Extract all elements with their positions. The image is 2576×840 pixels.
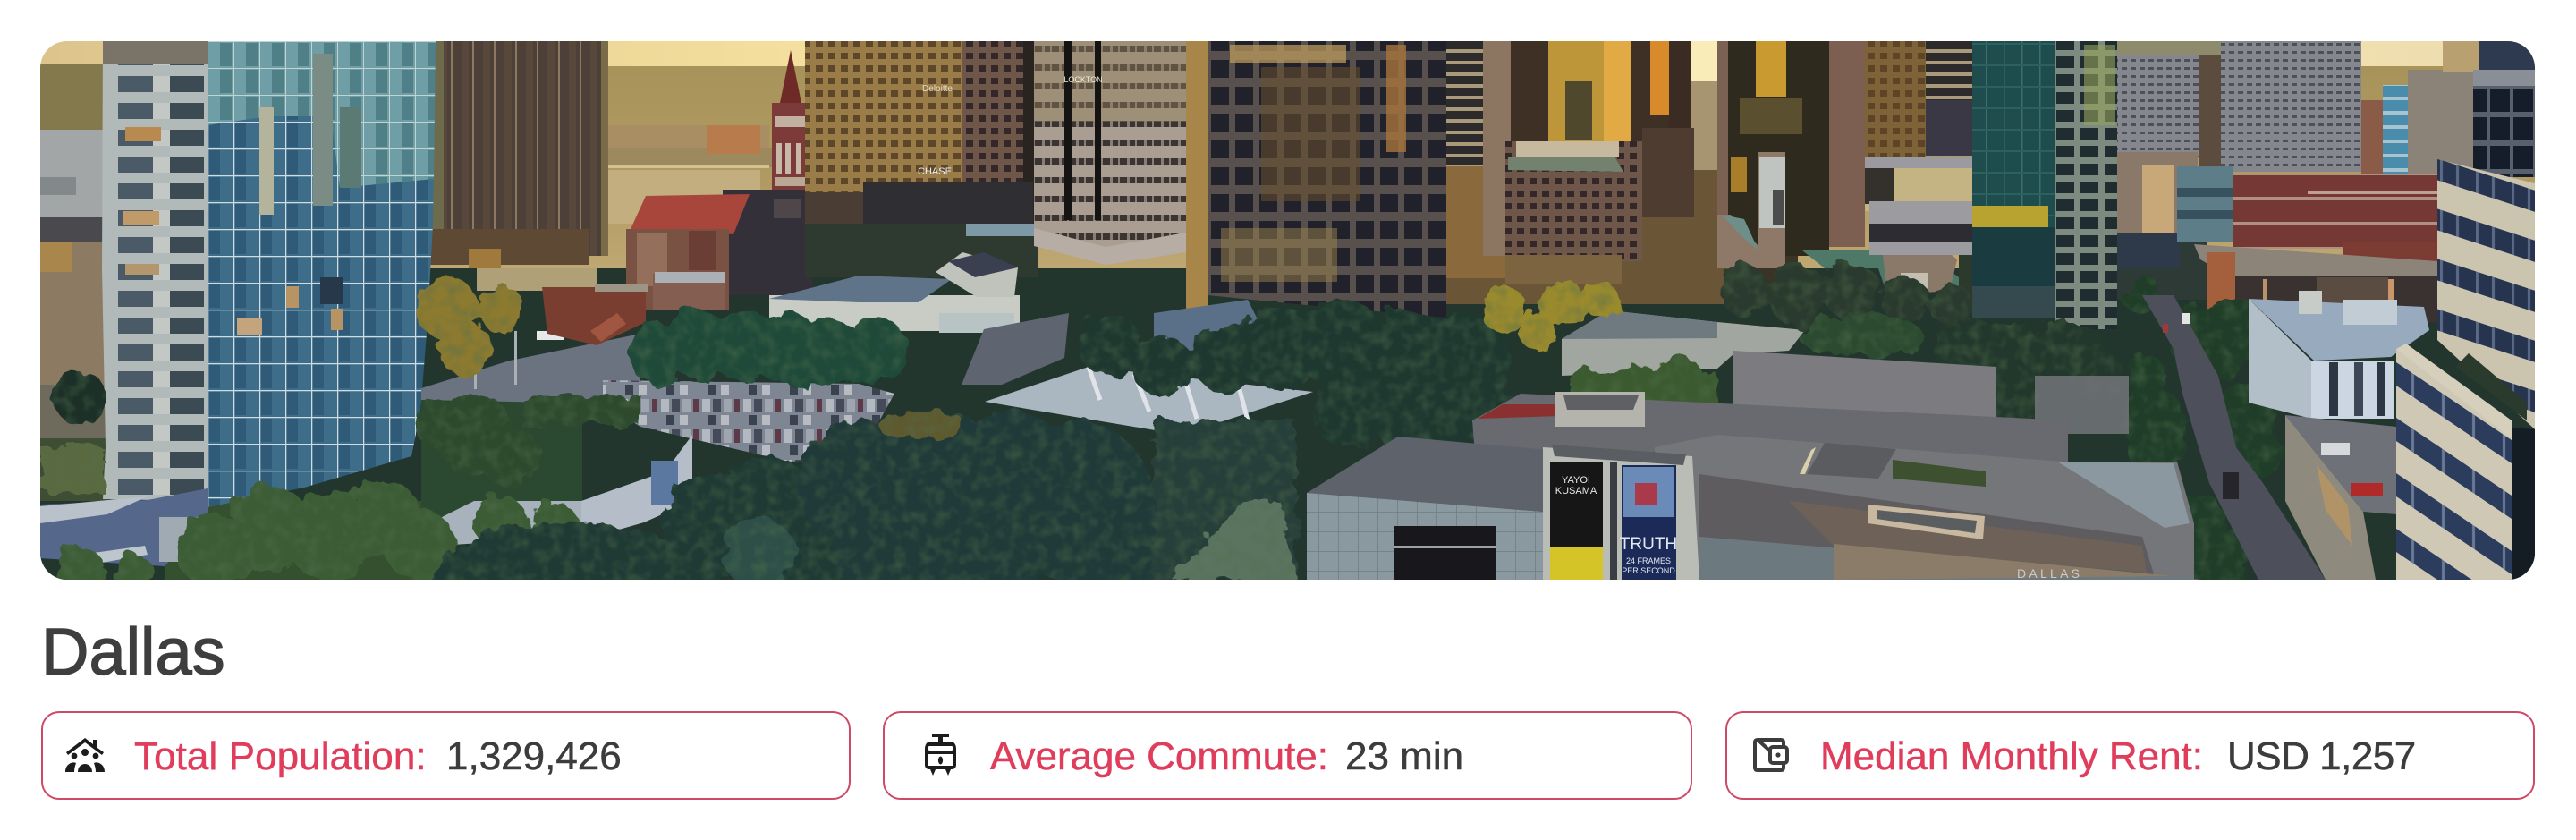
- sky and hazy horizon: [40, 41, 2535, 268]
- value: total population: 1,329,426: [446, 734, 622, 778]
- photo: Dallas skyline aerial view: [40, 41, 2535, 580]
- stone church tower and chapel: [1717, 152, 1972, 295]
- text on the banners and buildings: CHASE: [918, 166, 952, 177]
- parking structure: [2285, 415, 2396, 580]
- white building near chapel and low roof: [769, 252, 1805, 376]
- text on the banners and buildings: PER SECOND: [1622, 566, 1675, 575]
- grey high-rises and upper right skyline: [2117, 41, 2535, 190]
- icon: wallet: [1753, 738, 1789, 772]
- stat card: total population: [41, 711, 851, 800]
- text on the banners and buildings: 24 FRAMES: [1626, 556, 1671, 565]
- church with spire and red roof: [626, 50, 812, 310]
- stat card: average commute: [883, 711, 1692, 800]
- gold office tower: [805, 41, 1038, 277]
- text on the banners and buildings: YAYOI: [1562, 475, 1590, 486]
- left side buildings: [40, 130, 107, 438]
- green glass tower: [1972, 41, 2117, 329]
- text on the banners and buildings: TRUTH: [1620, 535, 1677, 554]
- museum front block with banners: [1307, 437, 1699, 580]
- road and parking lot: [421, 313, 1069, 462]
- tree canopy masses: [40, 259, 2284, 580]
- icon: tram: [925, 734, 956, 776]
- text on the banners and buildings: LOCKTON: [1063, 75, 1103, 84]
- text on the banners and buildings: [918, 75, 2080, 581]
- tower with balconies: [102, 41, 208, 501]
- low brick buildings: [477, 268, 648, 345]
- value: median monthly rent: USD 1,257: [2227, 734, 2416, 778]
- white office block: [2249, 291, 2429, 419]
- icon: house with people: [65, 738, 105, 772]
- label: average commute: Average Commute:: [990, 734, 1328, 778]
- dark ground and foliage base: [40, 170, 2535, 580]
- text on the banners and buildings: DALLAS: [2017, 566, 2080, 581]
- text on the banners and buildings: KUSAMA: [1555, 486, 1597, 496]
- value: average commute: 23 min: [1345, 734, 1463, 778]
- white plaza wall: [438, 435, 692, 546]
- label: median monthly rent: Median Monthly Rent:: [1820, 734, 2203, 778]
- midtown towers with sunset reflections: [1446, 41, 1972, 284]
- brick and teal mid-rise blocks: [2117, 152, 2437, 324]
- dark brown high-rise: [428, 41, 608, 268]
- tan office tower: [1034, 41, 1186, 265]
- curved glass tower: [208, 41, 436, 507]
- narrow city street: [2142, 295, 2326, 580]
- tower podium: [40, 488, 208, 567]
- heading: Dallas: Dallas: [41, 615, 225, 689]
- museum stepped roofs: [1472, 351, 2200, 580]
- concrete grid screen: [2035, 376, 2129, 434]
- stat card: median monthly rent: [1725, 711, 2535, 800]
- dark tower with golden reflections: [1186, 41, 1446, 318]
- blue roof behind trees: [1154, 300, 1258, 351]
- striped office building right: [2396, 159, 2535, 580]
- sawtooth white art building roof: [985, 367, 1313, 435]
- text on the banners and buildings: Deloitte: [922, 84, 953, 94]
- label: total population: Total Population:: [134, 734, 427, 778]
